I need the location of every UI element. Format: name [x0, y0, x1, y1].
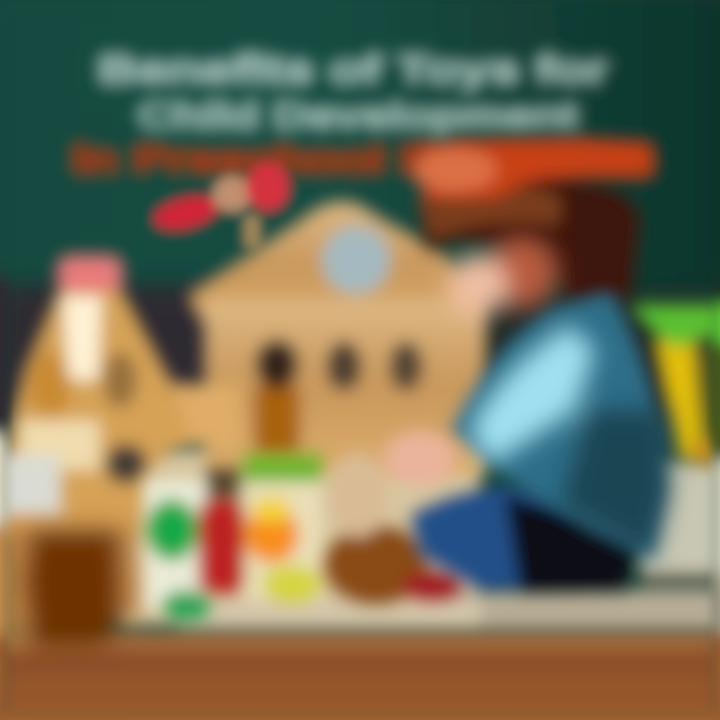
background: dark lower wall: [0, 285, 720, 430]
child shirt: [450, 292, 668, 560]
edge fill: right side: [707, 285, 720, 718]
house window left: [326, 341, 362, 391]
wooden block stack: [0, 525, 145, 645]
title: [72, 48, 652, 181]
background: unblurred canvas base: [0, 0, 720, 260]
toy bottle: [0, 256, 190, 540]
wooden toy school house: [165, 202, 485, 475]
edge fill: left side: [0, 265, 12, 718]
child shirt shading: [470, 325, 668, 555]
child hair and red cap: [413, 139, 652, 300]
toy animal figure: [324, 453, 462, 605]
icon: red toy bird: [149, 162, 290, 247]
edge fill: bottom: [0, 704, 720, 720]
background: pale floor: [120, 450, 720, 630]
child jeans: [410, 488, 640, 592]
house roof: [188, 202, 485, 330]
title line 3: in Preschool Education: [72, 139, 652, 181]
background: chalkboard: [0, 0, 720, 290]
house body: [205, 300, 485, 475]
child face: [447, 236, 558, 315]
colourful toy blocks: [145, 454, 322, 622]
title line 1: Benefits of Toys for: [98, 48, 608, 92]
child hand: [384, 431, 456, 485]
yellow and green toy: [630, 305, 720, 466]
title line 2: Child Development: [138, 95, 578, 136]
house window right: [389, 341, 423, 391]
table surface: [0, 632, 720, 720]
house door: [254, 385, 300, 457]
house clock: [322, 226, 390, 294]
child: [384, 139, 668, 592]
